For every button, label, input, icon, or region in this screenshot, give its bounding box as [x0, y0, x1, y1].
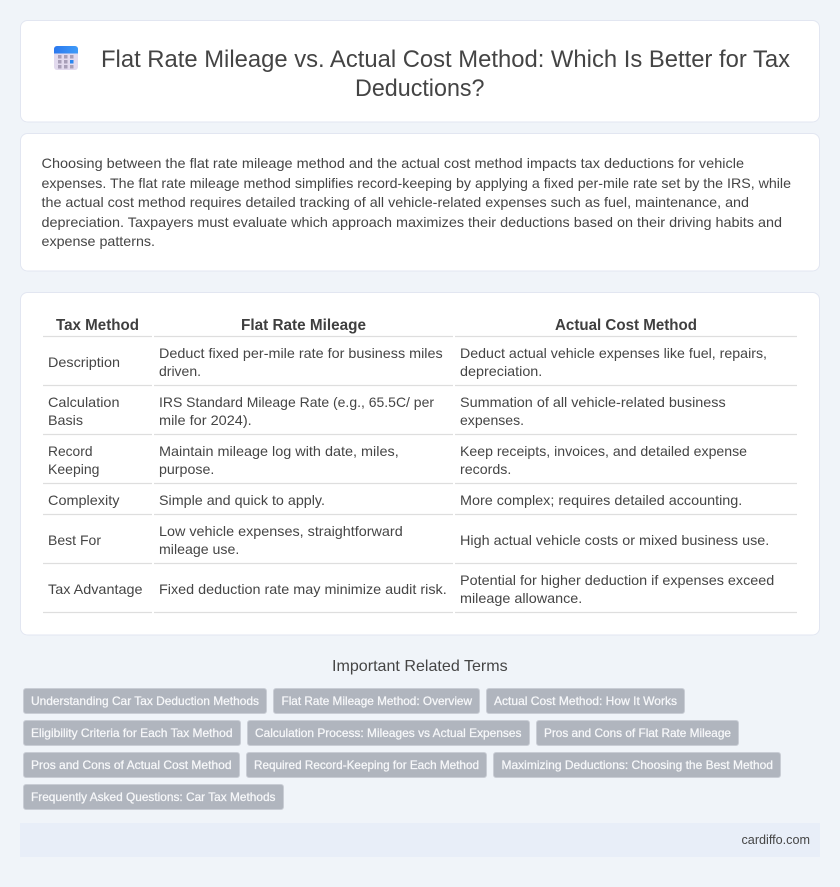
table header: Tax Method [56, 317, 139, 334]
tag [24, 752, 240, 778]
table row: tax advantage: Potential for higher deduction if expenses exceed [460, 572, 774, 588]
text block: introduction paragraph: Choosing between the flat rate mileage method and the actual cost method impacts tax deductions for vehicle [42, 155, 744, 171]
table header [43, 317, 797, 336]
tag: Understanding Car Tax Deduction Methods [31, 694, 259, 708]
table row: tax advantage [43, 572, 797, 612]
table row: description: Deduct fixed per-mile rate for business miles [159, 345, 443, 361]
table row: record keeping [43, 443, 797, 484]
table row: complexity [43, 492, 797, 514]
tag [24, 784, 284, 810]
panel: introduction [20, 134, 820, 271]
table row: calculation basis: Summation of all vehicle-related business [460, 394, 726, 410]
tag: Pros and Cons of Actual Cost Method [31, 758, 232, 772]
icon: calendar [54, 46, 78, 70]
table row: calculation basis: IRS Standard Mileage Rate (e.g., 65.5C/ per [159, 394, 434, 410]
table row: calculation basis: Basis [48, 412, 83, 428]
table row: complexity: Complexity [48, 492, 120, 508]
table row: description: driven. [159, 363, 201, 379]
footer [20, 823, 820, 857]
table row: best for [43, 523, 797, 564]
tag: Eligibility Criteria for Each Tax Method [31, 726, 232, 740]
table row: calculation basis: Calculation [48, 394, 120, 410]
tag: Flat Rate Mileage Method: Overview [282, 694, 472, 708]
table row: record keeping: Maintain mileage log with date, miles, [159, 443, 399, 459]
tag: Actual Cost Method: How It Works [494, 694, 677, 708]
text block: introduction paragraph: depreciation. Taxpayers must evaluate which approach maximizes their deductions based on their driving habits and [42, 214, 782, 230]
table row: tax advantage: Tax Advantage [48, 581, 143, 597]
table row: best for: High actual vehicle costs or mixed business use. [460, 532, 769, 548]
table header: Flat Rate Mileage [241, 317, 366, 334]
panel: comparison table [20, 292, 820, 635]
tag [486, 688, 684, 714]
table row: record keeping: purpose. [159, 461, 214, 477]
tag: Pros and Cons of Flat Rate Mileage [544, 726, 731, 740]
panel: title header [20, 20, 820, 122]
tag: Required Record-Keeping for Each Method [254, 758, 479, 772]
tag [24, 720, 240, 746]
table row: best for: mileage use. [159, 541, 239, 557]
table row: calculation basis [43, 394, 797, 434]
tag [494, 752, 780, 778]
table row: description: Deduct actual vehicle expenses like fuel, repairs, [460, 345, 767, 361]
table row: best for: Low vehicle expenses, straightforward [159, 523, 403, 539]
table row: calculation basis: expenses. [460, 412, 524, 428]
title [101, 46, 790, 102]
footer: cardiffo.com [742, 833, 810, 847]
table row: description [43, 345, 797, 386]
table row: record keeping: Keeping [48, 461, 100, 477]
text block: introduction paragraph: expense patterns. [42, 233, 155, 249]
table header: Actual Cost Method [555, 317, 697, 334]
table row: tax advantage: Fixed deduction rate may minimize audit risk. [159, 581, 447, 597]
table row: complexity: More complex; requires detailed accounting. [460, 492, 742, 508]
table row: tax advantage: mileage allowance. [460, 590, 582, 606]
table row: record keeping: Keep receipts, invoices, and detailed expense [460, 443, 747, 459]
panel: related term tags [24, 688, 780, 810]
table row: record keeping: records. [460, 461, 511, 477]
tag: Calculation Process: Mileages vs Actual Expenses [255, 726, 522, 740]
table row: description: depreciation. [460, 363, 542, 379]
table row: description: Description [48, 354, 120, 370]
tag [536, 720, 738, 746]
title: Flat Rate Mileage vs. Actual Cost Method: Which Is Better for Tax [101, 46, 790, 73]
tag [24, 688, 266, 714]
table row: best for: Best For [48, 532, 101, 548]
tag [246, 752, 486, 778]
table row: complexity: Simple and quick to apply. [159, 492, 325, 508]
tag: Maximizing Deductions: Choosing the Best Method [502, 758, 773, 772]
heading: important related terms: Important Related Terms [332, 658, 508, 675]
tag [248, 720, 530, 746]
tag: Frequently Asked Questions: Car Tax Methods [31, 790, 276, 804]
table row: record keeping: Record [48, 443, 92, 459]
tag [274, 688, 480, 714]
text block: introduction paragraph: the actual cost method requires detailed tracking of all vehicle-related expenses such as fuel, maintenance, and [42, 194, 749, 210]
text block: introduction paragraph: expenses. The flat rate mileage method simplifies record-keeping by applying a fixed per-mile rate set by the IRS, while [42, 175, 791, 191]
title: Deductions? [355, 75, 484, 102]
table row: calculation basis: mile for 2024). [159, 412, 252, 428]
text block: introduction paragraph [42, 155, 791, 249]
